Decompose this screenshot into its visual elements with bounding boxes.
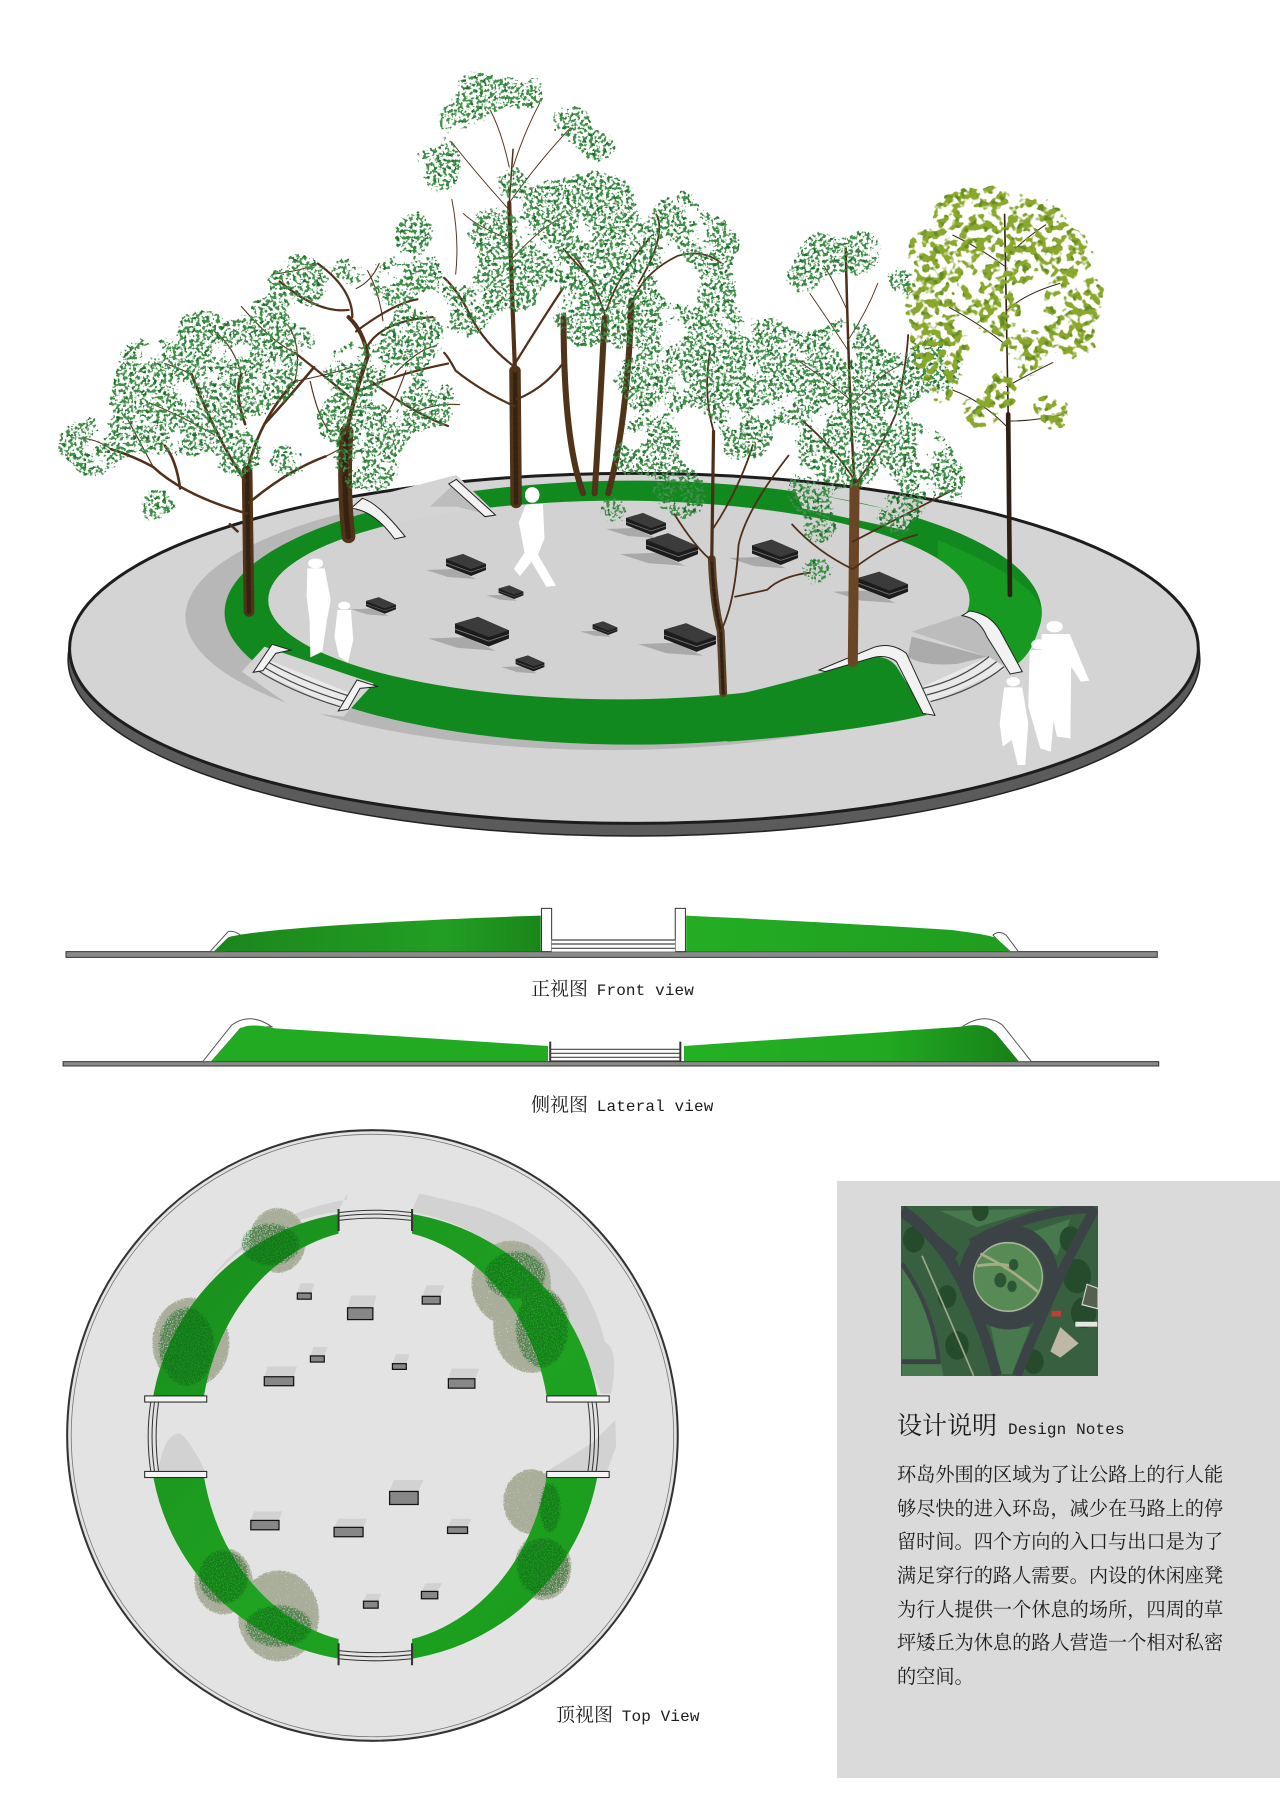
design notes paragraph: 够尽快的进入环岛，减少在马路上的停: [897, 1499, 1223, 1520]
aerial photo of roundabout: [901, 1206, 1098, 1376]
branches of left trees: [81, 103, 570, 612]
design notes paragraph: 满足穿行的路人需要。内设的休闲座凳: [897, 1566, 1223, 1587]
tree foliage, yellow green: [909, 190, 1100, 425]
walking person: [514, 487, 556, 587]
design notes paragraph: 的空间。: [897, 1667, 974, 1688]
top view plan: [67, 1130, 678, 1741]
ground line: [63, 1062, 1159, 1066]
caption: front view: 正视图 Front view: [531, 979, 694, 1000]
left lawn mound: [214, 916, 541, 952]
central plaza: [268, 501, 970, 699]
cast shadows: [158, 1193, 616, 1471]
family group, right: [1000, 621, 1089, 765]
plan entrances and steps: [145, 1209, 609, 1665]
plan benches: [251, 1283, 479, 1608]
green ring: [150, 1211, 601, 1662]
white ribs: [203, 1019, 1032, 1062]
pillars and steps: [541, 908, 685, 952]
entrance wedges, steps and white ribs: [253, 479, 1022, 715]
lateral view elevation: [63, 1019, 1159, 1066]
branches of right trees: [564, 214, 1064, 693]
entrance gaps in ring: [242, 475, 1025, 717]
tree foliage, green: [65, 77, 961, 584]
outer circle: [67, 1130, 678, 1741]
ground shadow of the mound: [185, 483, 1036, 750]
caption: top view: 顶视图 Top View: [556, 1705, 700, 1726]
illustration: aerial perspective of the roundabout: [65, 77, 1200, 836]
steps: [550, 1042, 680, 1062]
front view elevation: [66, 908, 1157, 957]
design notes paragraph: 环岛外围的区域为了让公路上的行人能: [897, 1465, 1223, 1486]
ground line: [66, 952, 1157, 957]
green lawn ring: [225, 475, 1042, 745]
design notes paragraph: 留时间。四个方向的入口与出口是为了: [897, 1532, 1223, 1553]
outer circular platform: [68, 473, 1200, 836]
white pedestrian silhouettes: [307, 487, 1089, 765]
design notes paragraph: 为行人提供一个休息的场所，四周的草: [897, 1600, 1223, 1621]
white ribs: [210, 931, 1018, 952]
left lawn mound: [211, 1025, 548, 1061]
front lawn end bulge: [727, 657, 927, 742]
heading: design notes: 设计说明 Design Notes: [897, 1413, 1125, 1440]
design notes paragraph: 坪矮丘为休息的路人营造一个相对私密: [897, 1633, 1223, 1654]
design notes paragraph: [897, 1464, 1223, 1688]
parent and child, left: [307, 558, 353, 663]
tree canopies under ring: [152, 1208, 572, 1662]
right lawn mound: [684, 1025, 1018, 1061]
benches: [351, 513, 908, 674]
trees: [65, 77, 1100, 693]
panel: design notes background: [837, 1181, 1280, 1778]
tree canopies over ring: [157, 1222, 571, 1649]
caption: lateral view: 侧视图 Lateral view: [531, 1095, 713, 1116]
right lawn mound: [686, 916, 1011, 952]
